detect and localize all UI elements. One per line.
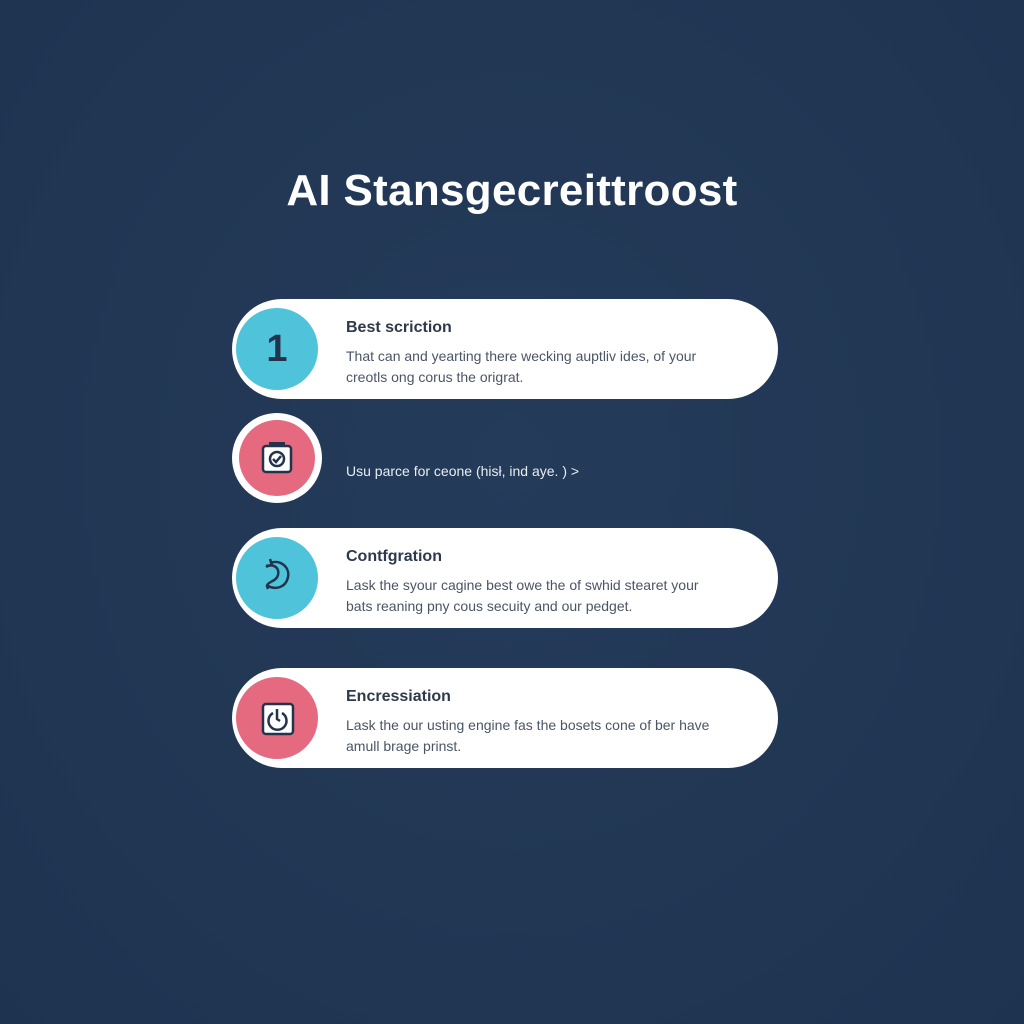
text 1: That can and yearting there wecking auptliv ides, of your creotls ong corus the origrat. bbox=[346, 348, 696, 385]
step 2 bbox=[232, 413, 579, 503]
text 2: Usu parce for ceone (hisł, ind aye. ) > bbox=[346, 463, 579, 479]
icon: camera check bbox=[232, 413, 322, 503]
title: AI Stansgecreittroost bbox=[286, 166, 738, 215]
text 4: Lask the our usting engine fas the bosets cone of ber have amull brage prinst. bbox=[346, 717, 709, 754]
heading 3: Contfgration bbox=[346, 548, 442, 565]
heading 4: Encressiation bbox=[346, 688, 451, 705]
card 4 bbox=[232, 668, 778, 768]
icon: number 1 bbox=[236, 308, 318, 390]
icon: timer bbox=[236, 677, 318, 759]
text 3: Lask the syour cagine best owe the of swhid stearet your bats reaning pny cous secuity and our pedget. bbox=[346, 577, 699, 614]
icon: cycle bbox=[236, 537, 318, 619]
icon: number 1: 1 bbox=[266, 328, 288, 370]
heading 1: Best scriction bbox=[346, 319, 452, 336]
card 3 bbox=[232, 528, 778, 628]
card 1 bbox=[232, 299, 778, 399]
